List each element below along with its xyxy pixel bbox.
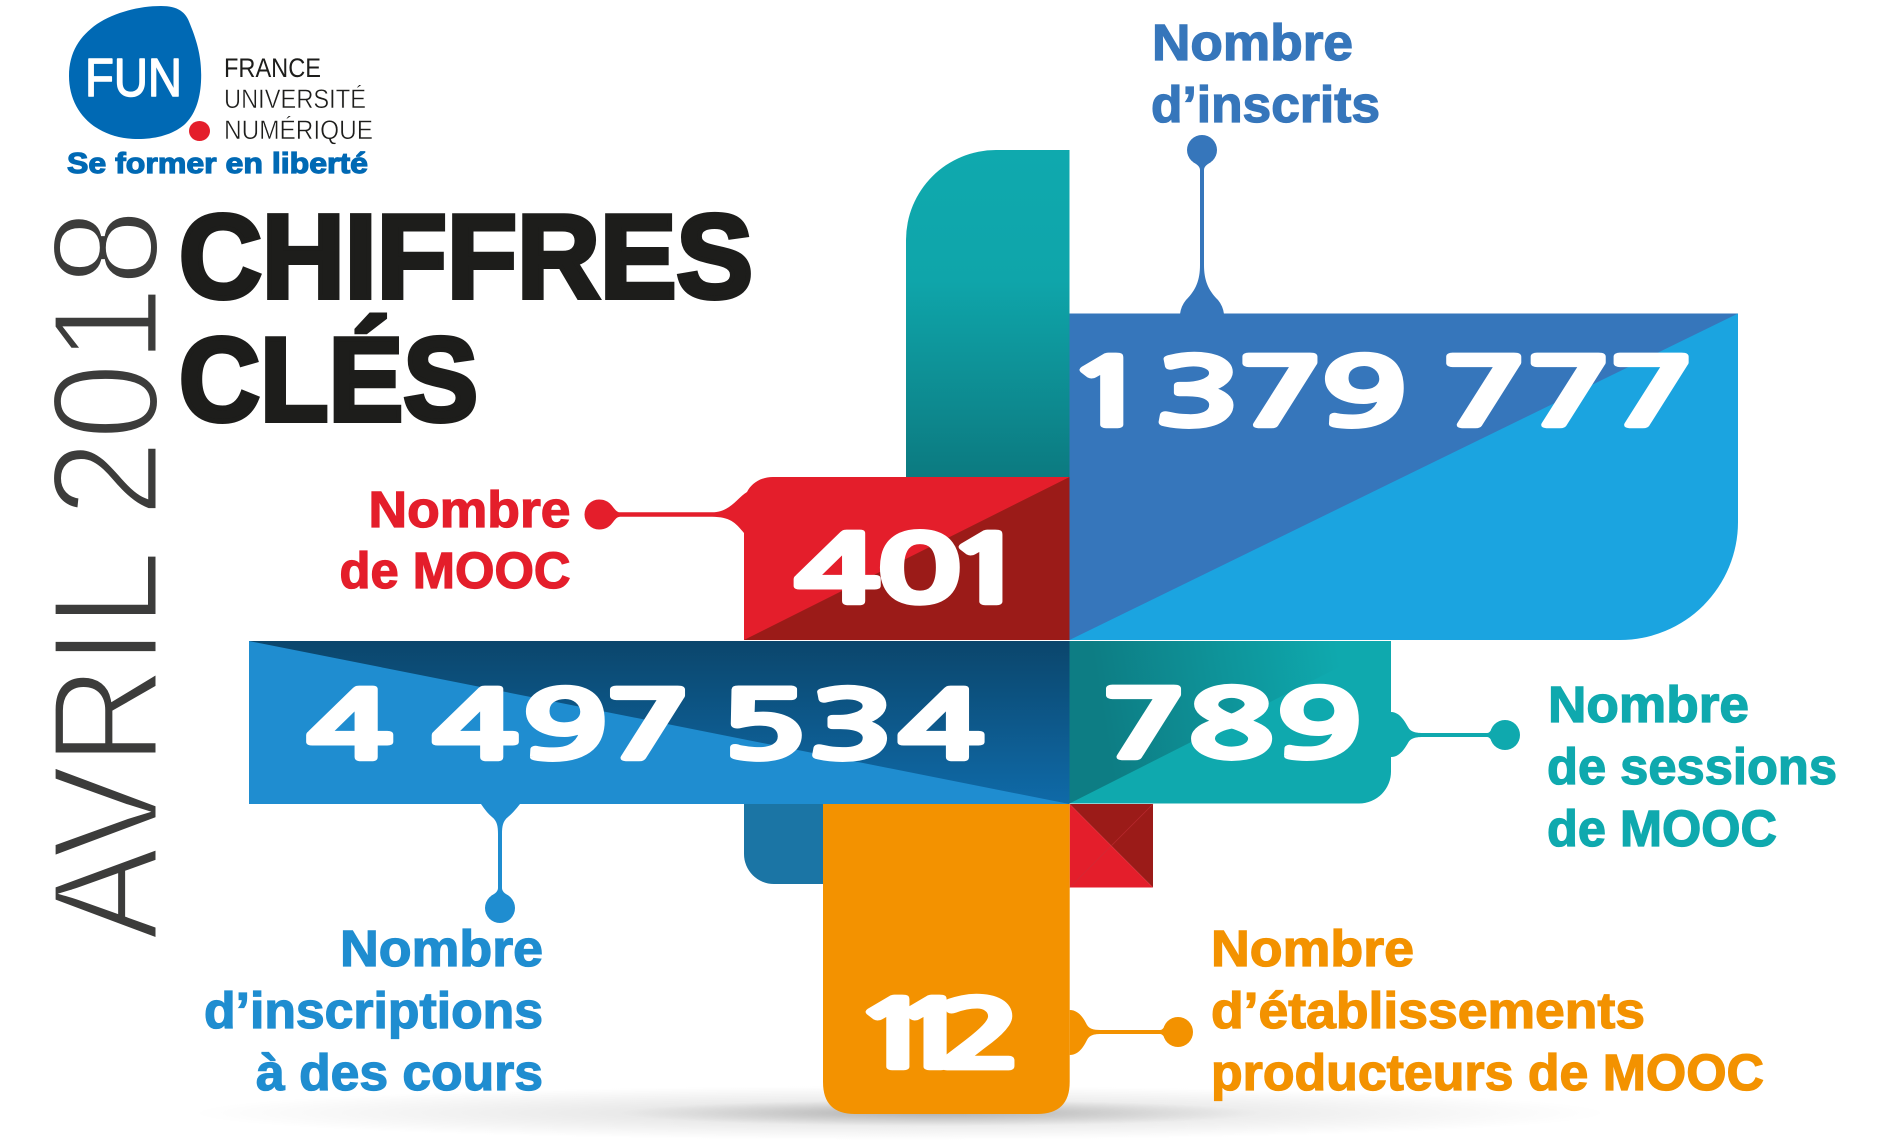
icon: red dot — [189, 121, 210, 141]
logo name: UNIVERSITÉ — [224, 84, 366, 114]
label: Nombre d'inscrits — [1151, 14, 1380, 133]
label: Nombre de MOOC: de MOOC — [340, 542, 570, 599]
value: 401: 401 — [794, 525, 1031, 617]
connector: sessions — [1391, 712, 1494, 757]
label: Nombre d'établissements producteurs de MOOC: producteurs de MOOC — [1211, 1044, 1764, 1101]
date: AVRIL 2018 (vertical): AVRIL 2018 — [20, 209, 190, 940]
connector: inscriptions — [481, 804, 520, 896]
logo wordmark FUN: FUN — [85, 48, 182, 108]
logo name: NUMÉRIQUE — [224, 115, 373, 145]
title: CHIFFRES — [179, 190, 753, 324]
value: 789: 789 — [1100, 680, 1363, 772]
connector dot: inscrits — [1187, 135, 1217, 165]
panel: nombre de sessions — [1070, 641, 1520, 804]
value: 4 497 534: 4 497 534 — [306, 681, 985, 773]
connector: établissements — [1070, 1010, 1167, 1055]
value: 112: 112 — [851, 990, 1024, 1082]
connector: inscrits — [1180, 162, 1224, 314]
label: Nombre de sessions de MOOC: de sessions — [1547, 738, 1837, 795]
label: Nombre d'inscrits: Nombre — [1152, 14, 1353, 71]
label: Nombre d'inscrits: d’inscrits — [1151, 76, 1380, 133]
panel: nombre d'établissements — [823, 804, 1193, 1114]
label: Nombre de MOOC — [340, 481, 570, 599]
label: Nombre d'inscriptions à des cours — [204, 920, 543, 1101]
ground shadow — [190, 1086, 1610, 1140]
label: Nombre de MOOC: Nombre — [368, 481, 570, 538]
label: Nombre de sessions de MOOC: Nombre — [1548, 676, 1749, 733]
value: 1 379 777: 1 379 777 — [1065, 348, 1695, 440]
logo tagline: Se former en liberté — [67, 148, 368, 180]
icon: blue FUN blob — [69, 6, 201, 139]
connector dot: inscriptions — [485, 893, 515, 923]
panel: nombre d'inscriptions — [249, 641, 1070, 923]
title — [179, 190, 753, 446]
label: Nombre d'établissements producteurs de MOOC — [1211, 920, 1764, 1101]
connector dot: sessions — [1490, 720, 1520, 750]
label: Nombre d'inscriptions à des cours: à des cours — [256, 1044, 543, 1101]
panel: small red square — [1070, 804, 1153, 888]
panel: nombre de MOOC — [584, 477, 1070, 640]
label: Nombre de sessions de MOOC: de MOOC — [1547, 800, 1777, 857]
label: Nombre d'établissements producteurs de MOOC: d’établissements — [1211, 982, 1645, 1039]
logo name: FRANCE — [224, 53, 321, 83]
label: Nombre d'établissements producteurs de MOOC: Nombre — [1211, 920, 1414, 977]
label: Nombre de sessions de MOOC — [1547, 676, 1837, 857]
connector dot: établissements — [1163, 1017, 1193, 1047]
title: CLÉS — [179, 314, 478, 446]
panel: dark blue tab — [744, 804, 830, 884]
logo: France Université Numérique — [67, 6, 373, 180]
label: Nombre d'inscriptions à des cours: Nombre — [340, 920, 543, 977]
logo name — [224, 53, 373, 145]
label: Nombre d'inscriptions à des cours: d’inscriptions — [204, 982, 543, 1039]
panel: nombre d'inscrits — [1065, 135, 1738, 640]
panel: back teal tab — [906, 150, 1070, 477]
